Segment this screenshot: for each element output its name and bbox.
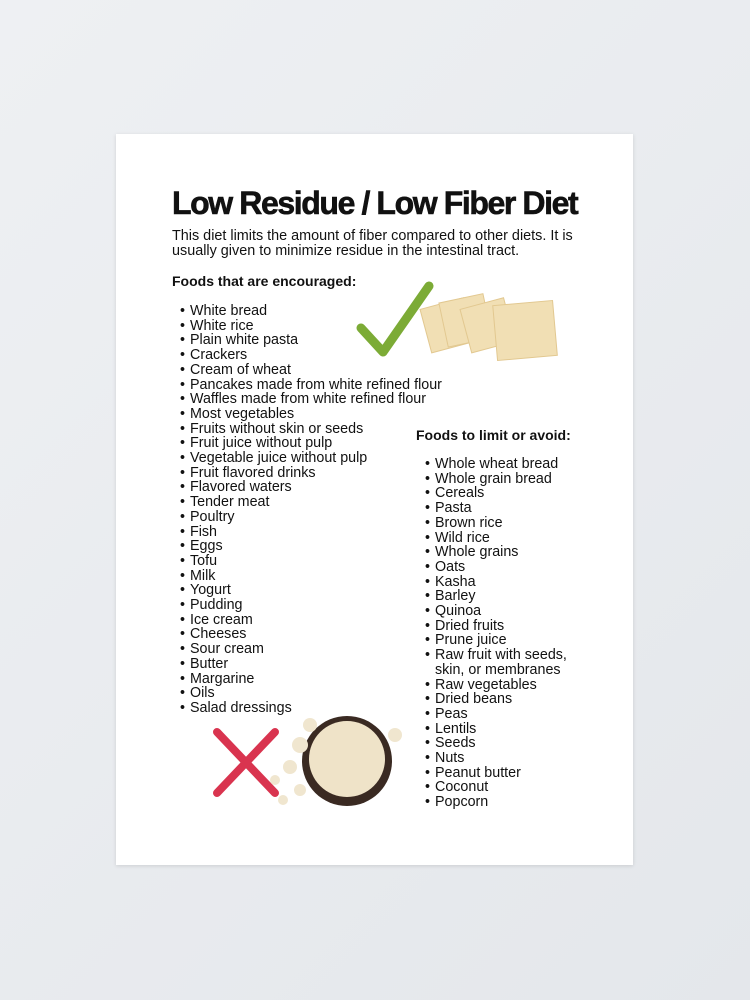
list: encouraged: Yogurt: [190, 582, 231, 598]
list: avoid: Cereals: [435, 485, 484, 501]
list: encouraged: Butter: [190, 656, 228, 672]
list: encouraged: Poultry: [190, 509, 234, 525]
list: encouraged: Fish: [190, 524, 217, 540]
list: avoid: Dried fruits: [435, 618, 504, 634]
list: avoid: Brown rice: [435, 515, 503, 531]
list: encouraged: Cheeses: [190, 626, 246, 642]
list: encouraged: Fruit juice without pulp: [190, 435, 332, 451]
list: encouraged: Fruit flavored drinks: [190, 465, 316, 481]
poster paper: [116, 134, 633, 865]
list: encouraged: White bread: [190, 303, 267, 319]
list: encouraged: Eggs: [190, 538, 223, 554]
list: encouraged: Pancakes made from white refined flour: [190, 377, 442, 393]
list: encouraged: Tofu: [190, 553, 217, 569]
list: encouraged: Crackers: [190, 347, 247, 363]
list: encouraged: Waffles made from white refined flour: [190, 391, 426, 407]
list: avoid: Whole wheat bread: [435, 456, 558, 472]
intro text: This diet limits the amount of fiber compared to other diets. It is usually given to minimize residue in the intestinal tract.: [172, 228, 573, 259]
icon: red X with popcorn bowl: [213, 716, 402, 806]
list: encouraged: Most vegetables: [190, 406, 294, 422]
list: encouraged: Flavored waters: [190, 479, 292, 495]
list: avoid: Prune juice: [435, 632, 507, 648]
list: encouraged: Sour cream: [190, 641, 264, 657]
list: encouraged: Vegetable juice without pulp: [190, 450, 367, 466]
list: avoid: Kasha: [435, 574, 476, 590]
list: avoid: skin, or membranes: [435, 662, 561, 678]
list: encouraged: Plain white pasta: [190, 332, 298, 348]
list: encouraged: Ice cream: [190, 612, 253, 628]
title: Low Residue / Low Fiber Diet: [172, 185, 577, 221]
list: avoid: Raw fruit with seeds,: [435, 647, 567, 663]
list: encouraged: Margarine: [190, 671, 254, 687]
list: avoid: Barley: [435, 588, 476, 604]
list: avoid: Lentils: [435, 721, 476, 737]
list: avoid: Whole grain bread: [435, 471, 552, 487]
list: encouraged: Cream of wheat: [190, 362, 291, 378]
list: avoid: Oats: [435, 559, 465, 575]
list: encouraged: Milk: [190, 568, 215, 584]
list: avoid: Quinoa: [435, 603, 481, 619]
heading: encouraged: Foods that are encouraged:: [172, 273, 356, 289]
list: avoid: Popcorn: [435, 794, 488, 810]
heading: limit or avoid: Foods to limit or avoid:: [416, 427, 571, 443]
list: encouraged: Fruits without skin or seeds: [190, 421, 363, 437]
list: avoid: Peas: [435, 706, 468, 722]
list: encouraged: Pudding: [190, 597, 242, 613]
list: avoid: Pasta: [435, 500, 472, 516]
list: avoid: Dried beans: [435, 691, 512, 707]
icon: green check with crackers: [356, 282, 558, 361]
list: encouraged: White rice: [190, 318, 254, 334]
list: encouraged: Salad dressings: [190, 700, 292, 716]
list: encouraged: [180, 303, 442, 716]
list: encouraged: Oils: [190, 685, 215, 701]
list: avoid: [426, 456, 567, 810]
list: avoid: Coconut: [435, 779, 488, 795]
list: avoid: Peanut butter: [435, 765, 521, 781]
list: avoid: Seeds: [435, 735, 476, 751]
list: avoid: Wild rice: [435, 530, 490, 546]
list: avoid: Nuts: [435, 750, 464, 766]
list: avoid: Whole grains: [435, 544, 518, 560]
list: avoid: Raw vegetables: [435, 677, 537, 693]
list: encouraged: Tender meat: [190, 494, 269, 510]
